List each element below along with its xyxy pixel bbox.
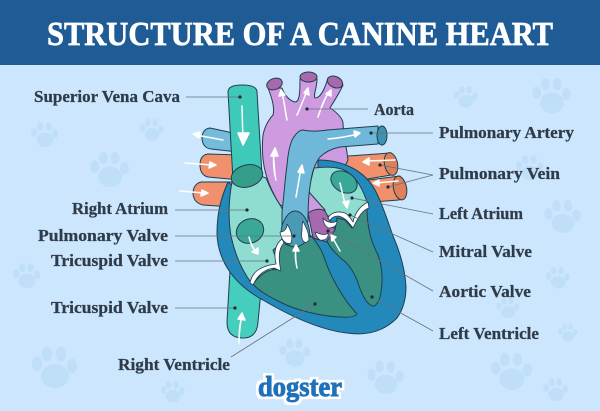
superior vena cava [228, 85, 265, 191]
label: Aortic Valve: Aortic Valve [439, 282, 531, 301]
title: STRUCTURE OF A CANINE HEART [47, 16, 553, 53]
label: Right Ventricle: Right Ventricle [118, 355, 230, 374]
left ventricle [327, 208, 382, 306]
label: Superior Vena Cava: Superior Vena Cava [34, 87, 180, 106]
label: Pulmonary Artery: Pulmonary Artery [439, 123, 575, 142]
blood flow arrows [180, 88, 398, 343]
left atrium [308, 167, 368, 225]
pulmonary artery left branch [202, 128, 238, 152]
aorta wedge behind valves [306, 192, 325, 216]
label: Aorta: Aorta [374, 100, 414, 119]
pulmonary veins right [320, 151, 409, 202]
inferior vena cava [227, 270, 262, 338]
label: Pulmonary Vein: Pulmonary Vein [439, 164, 560, 183]
label: Pulmonary Valve: Pulmonary Valve [38, 226, 168, 245]
heart illustration [180, 72, 409, 343]
header banner [0, 0, 600, 65]
label: Mitral Valve: Mitral Valve [439, 242, 532, 261]
white valve flaps [250, 202, 369, 285]
aorta [262, 72, 348, 218]
pulmonary artery [281, 126, 387, 247]
pulmonary vein lower left [193, 182, 235, 207]
label: Tricuspid Valve lower: Tricuspid Valve [51, 298, 168, 317]
valve ovals [327, 166, 361, 198]
label: Left Atrium: Left Atrium [439, 204, 523, 223]
label: Tricuspid Valve upper: Tricuspid Valve [51, 251, 168, 270]
label: Right Atrium: Right Atrium [72, 199, 168, 218]
pulmonary vein upper left [200, 154, 240, 180]
right ventricle [253, 236, 357, 317]
aortic root [308, 209, 335, 242]
right atrium [229, 172, 284, 284]
label: Left Ventricle: Left Ventricle [439, 324, 539, 343]
leader lines and dots [175, 95, 433, 357]
logo: dogster: dogster [258, 372, 342, 403]
heart outer wall [217, 160, 406, 334]
